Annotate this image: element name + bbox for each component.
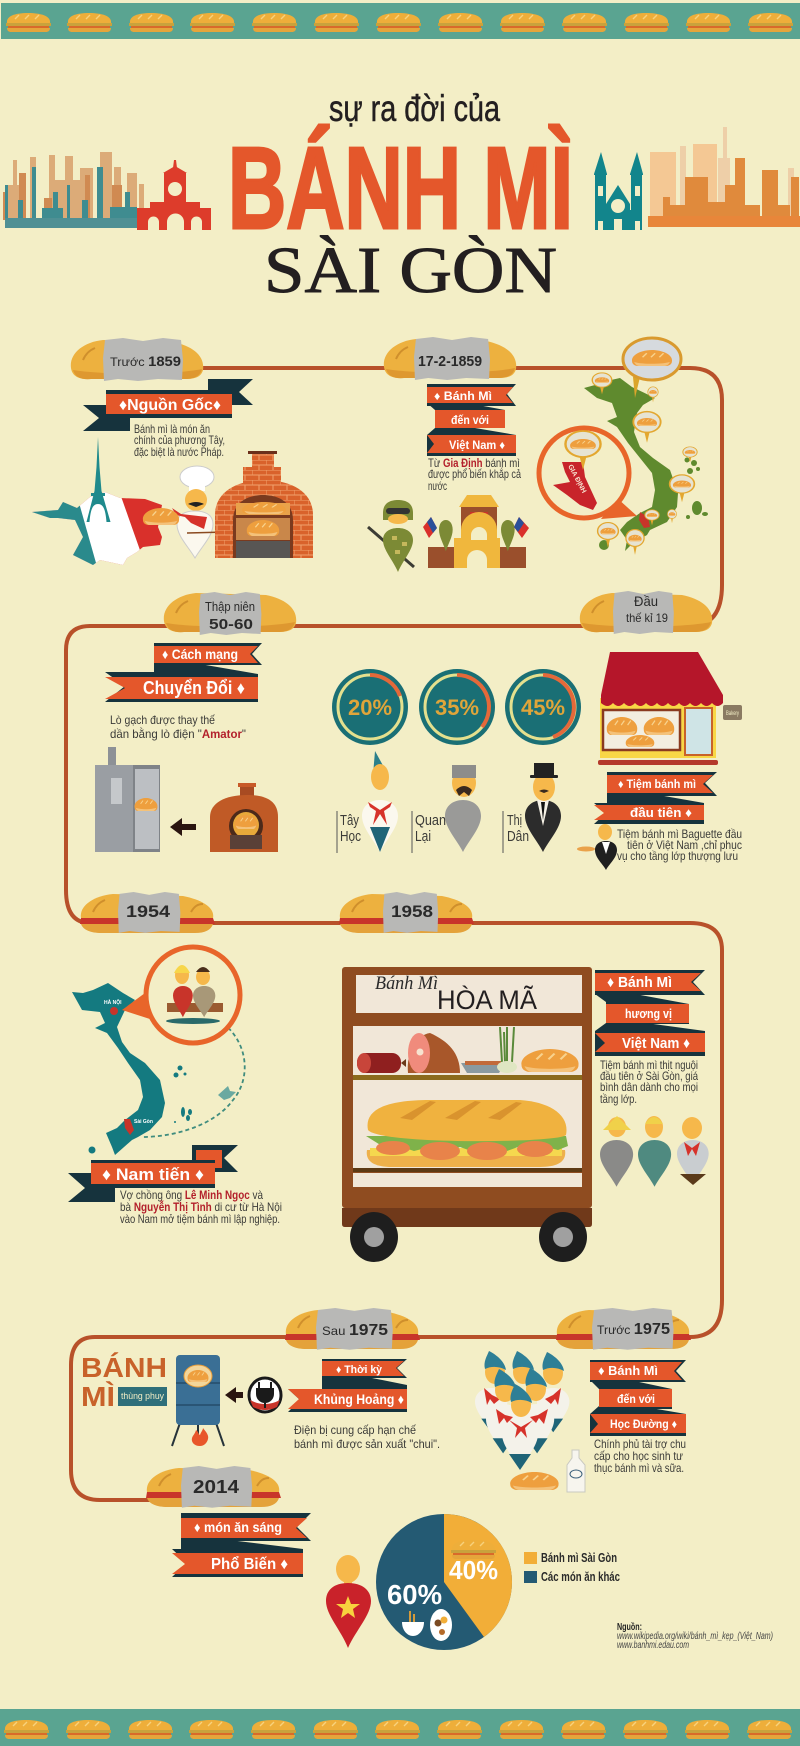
top banner with sandwiches bbox=[1, 3, 800, 39]
legend bbox=[524, 1550, 620, 1584]
ribbon: Bánh Mì đến với Học Đường: đến với bbox=[617, 1392, 655, 1406]
pie chart bbox=[376, 1514, 512, 1650]
heading: Bánh mì thùng phuy: MÌ bbox=[81, 1381, 115, 1412]
shelf: salami bbox=[357, 1053, 406, 1073]
heading: Bánh mì thùng phuy bbox=[81, 1352, 167, 1412]
cart sign: Bánh Mì: Bánh Mì bbox=[375, 973, 438, 994]
ribbon: món ăn sáng Phổ Biến: ♦ món ăn sáng bbox=[194, 1519, 282, 1535]
icon: electric oven bbox=[95, 747, 160, 852]
ribbon: Thời kỳ Khủng Hoảng: ♦ Thời kỳ bbox=[336, 1364, 383, 1376]
date label: Trước 1975 bbox=[556, 1308, 691, 1350]
text: first bakery: tiên ở Việt Nam ,chỉ phục bbox=[627, 838, 742, 852]
shelf: loaf bbox=[521, 1049, 579, 1072]
date label: 1954 bbox=[80, 892, 215, 933]
ribbon: món ăn sáng Phổ Biến: Phổ Biến ♦ bbox=[211, 1555, 288, 1573]
callout: couple migrating bbox=[122, 947, 240, 1043]
text: origin: đặc biệt là nước Pháp. bbox=[134, 445, 224, 459]
figure: Quan Lại: Quan bbox=[415, 812, 446, 829]
ribbon: Bánh Mì đến với Học Đường bbox=[590, 1360, 686, 1436]
date label: 1954: 1954 bbox=[126, 902, 171, 921]
icon: chef bbox=[143, 466, 227, 558]
icon: bakery shop: Bakery bbox=[726, 711, 739, 717]
gauge: 45% bbox=[505, 669, 581, 745]
date label: 2014: 2014 bbox=[193, 1477, 239, 1497]
skyline left bbox=[3, 152, 144, 228]
text: Gia Định bbox=[428, 456, 521, 493]
text: first bakery: vụ cho tầng lớp thượng lưu bbox=[617, 849, 738, 863]
wheels bbox=[350, 1212, 587, 1262]
date label: Đầu thế kỉ 19: Đầu bbox=[634, 593, 658, 609]
ribbon: Bánh Mì đến với Việt Nam: Việt Nam ♦ bbox=[449, 438, 505, 452]
heading: Bánh mì thùng phuy: thùng phuy bbox=[121, 1391, 164, 1401]
date label: Sau 1975: Sau 1975 bbox=[322, 1322, 388, 1339]
ribbon: Tiệm bánh mì đầu tiên bbox=[594, 772, 717, 824]
icon: bakery shop bbox=[598, 652, 742, 765]
timeline path bbox=[66, 368, 722, 1500]
figure: Thị Dân: Dân bbox=[507, 828, 529, 845]
sources bbox=[617, 1621, 773, 1651]
text: Gia Định: Từ Gia Định bánh mì bbox=[428, 456, 520, 470]
ribbon: Bánh Mì hương vị Việt Nam bbox=[595, 970, 705, 1056]
map: Vietnam migration: HÀ NỘI bbox=[104, 998, 122, 1006]
date label: Trước 1859 bbox=[71, 338, 203, 381]
text: electric oven: Lò gạch được thay thế bbox=[110, 713, 215, 727]
ribbon: Nguồn Gốc: ♦Nguồn Gốc♦ bbox=[119, 397, 221, 414]
pin: large bbox=[623, 338, 681, 398]
icon: brick oven bbox=[215, 451, 313, 558]
shelf: ham bbox=[408, 1033, 460, 1073]
ribbon: Bánh Mì hương vị Việt Nam: Việt Nam ♦ bbox=[622, 1035, 690, 1052]
ribbon: Bánh Mì đến với Việt Nam: ♦ Bánh Mì bbox=[434, 389, 492, 403]
pie icon: plate bbox=[430, 1609, 452, 1641]
ribbon: Nguồn Gốc bbox=[83, 379, 253, 431]
callout: Gia Định bbox=[539, 428, 637, 519]
text: Gia Định: nước bbox=[428, 479, 447, 493]
text: school: cấp cho học sinh tư bbox=[594, 1449, 683, 1463]
figure: Quan Lại: Lại bbox=[415, 828, 431, 845]
title: sự ra đời của: sự ra đời của bbox=[329, 88, 500, 129]
icon: waiter bbox=[577, 824, 617, 870]
ribbon: Bánh Mì đến với Việt Nam bbox=[427, 384, 516, 456]
text: Nam tiến: bà Nguyễn Thị Tình di cư từ Hà Nội bbox=[120, 1199, 282, 1214]
pie icon: sandwich bbox=[451, 1540, 496, 1559]
sources: Nguồn: bbox=[617, 1621, 642, 1633]
date label: Đầu thế kỉ 19: thế kỉ 19 bbox=[626, 611, 668, 625]
figure: Vietnamese person bbox=[326, 1555, 371, 1648]
text: Sau 1975 bbox=[294, 1423, 440, 1451]
icon: citadel with flags bbox=[423, 495, 529, 568]
icon: barrel stove bbox=[172, 1355, 224, 1446]
title: SÀI GÒN: SÀI GÒN bbox=[264, 234, 557, 307]
ribbon: Cách mạng Chuyển Đổi: ♦ Cách mạng bbox=[162, 646, 238, 662]
text: origin: Bánh mì là món ăn bbox=[134, 422, 210, 436]
date label: Thập niên 50-60: 50-60 bbox=[209, 616, 253, 633]
figure: Tây Học: Học bbox=[340, 828, 361, 845]
text: electric oven: dần bằng lò điện "Amator" bbox=[110, 726, 246, 741]
ribbon: Bánh Mì đến với Việt Nam: đến với bbox=[451, 413, 489, 427]
ribbon: Nam tiến: ♦ Nam tiến ♦ bbox=[102, 1165, 204, 1184]
callout: Gia Định: GIA ĐỊNH bbox=[566, 464, 587, 495]
gauge: 20% bbox=[332, 669, 408, 745]
text: Nam tiến: vào Nam mở tiệm bánh mì lập nghiệp. bbox=[120, 1212, 280, 1226]
text: electric oven bbox=[110, 713, 246, 741]
date label: 1958 bbox=[339, 892, 474, 933]
shelf: herbs bbox=[497, 1027, 517, 1073]
arrow: oven replaced bbox=[170, 818, 196, 836]
text: Gia Định: được phổ biến khắp cả bbox=[428, 466, 521, 481]
gauge: 35%: 35% bbox=[435, 695, 479, 720]
gauge: 20%: 20% bbox=[348, 695, 392, 720]
date label: Thập niên 50-60 bbox=[164, 592, 296, 635]
shelf: bowl bbox=[461, 1061, 505, 1073]
text: Hòa Mã: đầu tiên ở Sài Gòn, giá bbox=[600, 1069, 698, 1083]
heading: Bánh mì thùng phuy: BÁNH bbox=[81, 1352, 167, 1383]
food cart: Hòa Mã bbox=[342, 967, 592, 1262]
big sandwich bbox=[366, 1100, 568, 1167]
icon: power plug bbox=[249, 1378, 281, 1412]
legend: Các món ăn khác bbox=[541, 1569, 620, 1584]
ribbon: Tiệm bánh mì đầu tiên: đầu tiên ♦ bbox=[630, 805, 692, 820]
ribbon: Bánh Mì hương vị Việt Nam: ♦ Bánh Mì bbox=[607, 974, 672, 991]
text: Hòa Mã: tầng lớp. bbox=[600, 1092, 637, 1106]
figures: students group bbox=[475, 1351, 569, 1470]
date label: 17-2-1859: 17-2-1859 bbox=[418, 353, 482, 370]
map: Vietnam migration: Sài Gòn bbox=[134, 1119, 153, 1125]
map: Vietnam with bread pins bbox=[539, 338, 708, 555]
text: school: thục bánh mì và sữa. bbox=[594, 1461, 684, 1475]
ribbon: Bánh Mì đến với Học Đường: ♦ Bánh Mì bbox=[598, 1363, 658, 1378]
figure: Tây Học bbox=[337, 751, 398, 853]
date label: Trước 1859: Trước 1859 bbox=[110, 353, 181, 369]
pie icon: noodle bowl bbox=[402, 1611, 424, 1636]
map: Vietnam migration bbox=[72, 983, 245, 1155]
date label: Trước 1975: Trước 1975 bbox=[597, 1321, 670, 1338]
text: Sau 1975: bánh mì được sản xuất "chui". bbox=[294, 1437, 440, 1451]
ribbon: Cách mạng Chuyển Đổi: Chuyển Đổi ♦ bbox=[143, 678, 245, 698]
ribbon: Thời kỳ Khủng Hoảng bbox=[288, 1359, 407, 1412]
text: first bakery bbox=[617, 827, 742, 863]
ribbon: Nam tiến bbox=[68, 1145, 238, 1202]
legend: Bánh mì Sài Gòn bbox=[541, 1550, 617, 1565]
icon: soldier bbox=[368, 500, 414, 572]
ribbon: Bánh Mì đến với Học Đường: Học Đường ♦ bbox=[610, 1417, 677, 1431]
skyline right bbox=[648, 127, 800, 227]
ribbon: Thời kỳ Khủng Hoảng: Khủng Hoảng ♦ bbox=[314, 1391, 404, 1407]
icon: France map with Eiffel tower bbox=[32, 438, 162, 565]
ribbon: Tiệm bánh mì đầu tiên: ♦ Tiệm bánh mì bbox=[618, 777, 696, 791]
figure: Thị Dân: Thị bbox=[507, 812, 522, 829]
icon: wood oven bbox=[210, 783, 278, 852]
ribbon: món ăn sáng Phổ Biến bbox=[172, 1513, 311, 1577]
text: first bakery: Tiệm bánh mì Baguette đầu bbox=[617, 827, 742, 841]
icon: cathedral bbox=[594, 152, 643, 230]
date label: Đầu thế kỉ 19 bbox=[580, 591, 712, 634]
title: BÁNH MÌ: BÁNH MÌ bbox=[228, 123, 573, 253]
cart sign: HÒA MÃ: HÒA MÃ bbox=[437, 984, 537, 1015]
arrow: plug to barrel bbox=[225, 1387, 243, 1403]
text: Nam tiến: Vợ chồng ông Lê Minh Ngọc và bbox=[120, 1188, 263, 1202]
ribbon: Cách mạng Chuyển Đổi bbox=[105, 643, 262, 702]
text: origin: chính của phương Tây, bbox=[134, 433, 225, 447]
gauge: 45%: 45% bbox=[521, 695, 565, 720]
bottom banner with sandwiches bbox=[0, 1709, 800, 1746]
text: school: Chính phủ tài trợ chu bbox=[594, 1437, 686, 1451]
sources: www.banhmi.edau.com bbox=[617, 1640, 689, 1651]
date label: 17-2-1859 bbox=[384, 337, 516, 380]
icon: clock tower bbox=[137, 160, 211, 230]
text: Hòa Mã bbox=[600, 1058, 698, 1106]
figures: three customers bbox=[600, 1116, 709, 1187]
figure: Quan Lại bbox=[412, 765, 481, 853]
text: origin bbox=[134, 422, 225, 459]
date label: Sau 1975 bbox=[285, 1308, 420, 1350]
pie label: 40%: 40% bbox=[449, 1555, 498, 1585]
text: Hòa Mã: Tiệm bánh mì thịt nguội bbox=[600, 1058, 698, 1072]
text: Nam tiến bbox=[120, 1188, 282, 1226]
pie label: 60%: 60% bbox=[387, 1579, 442, 1610]
date label: 2014 bbox=[146, 1466, 281, 1508]
text: Sau 1975: Điện bị cung cấp hạn chế bbox=[294, 1423, 416, 1437]
ribbon: Bánh Mì hương vị Việt Nam: hương vị bbox=[625, 1006, 672, 1021]
figure: Tây Học: Tây bbox=[340, 812, 359, 829]
icon: bread and milk bbox=[510, 1450, 585, 1492]
date label: Thập niên 50-60: Thập niên bbox=[205, 599, 255, 614]
figure: Thị Dân bbox=[503, 763, 561, 853]
gauge: 35% bbox=[419, 669, 495, 745]
text: school bbox=[594, 1437, 686, 1475]
text: Hòa Mã: bình dân dành cho mọi bbox=[600, 1080, 698, 1094]
date label: 1958: 1958 bbox=[391, 902, 433, 921]
